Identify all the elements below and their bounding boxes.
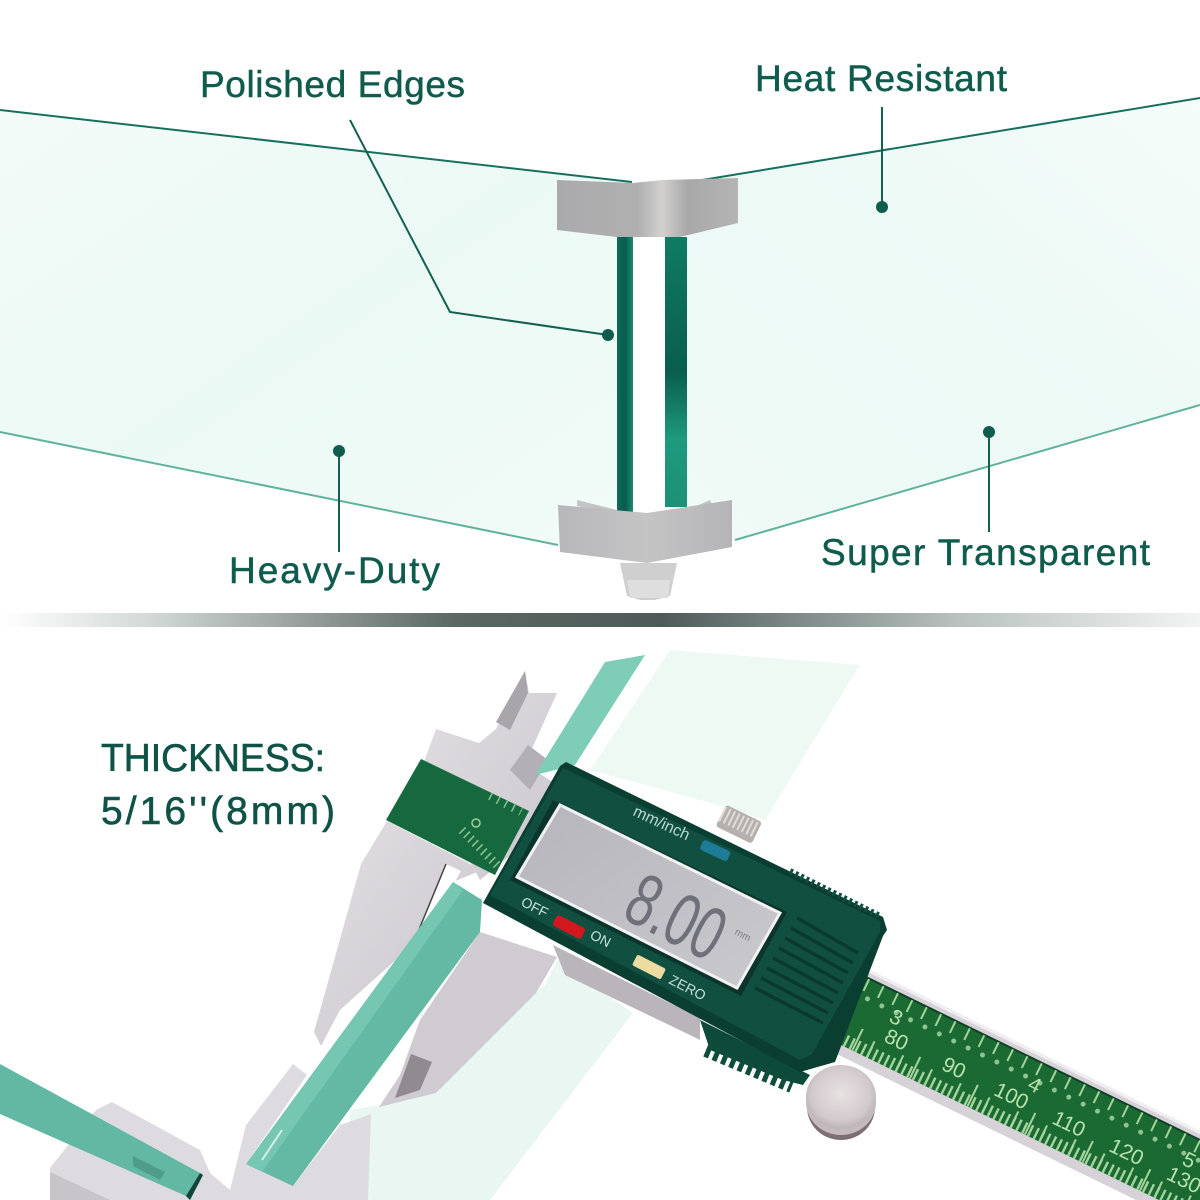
scale numbers: 4 (1024, 1072, 1045, 1098)
label: Heat Resistant: Heat Resistant (755, 58, 1008, 99)
LCD recess (510, 800, 787, 996)
panel: glass corner product view (0, 98, 1200, 600)
right glass pane (687, 98, 1200, 540)
glass edge through caliper, upper part (535, 655, 645, 775)
caliper green scale stub (386, 759, 529, 875)
glass background plates (350, 650, 860, 1200)
thumb lock disc (806, 1065, 876, 1140)
scale numbers: 120 (1106, 1134, 1147, 1170)
heading: thickness: THICKNESS: (101, 737, 325, 780)
bottom metal bracket (558, 500, 732, 600)
left glass pane (0, 111, 632, 545)
mode button (699, 839, 731, 862)
label: Heavy-Duty: Heavy-Duty (229, 550, 440, 591)
grip ridges (755, 918, 858, 1023)
value: thickness measurement: 5/16''(8mm) (101, 790, 335, 833)
ON label: ON (588, 926, 614, 950)
top metal bracket (557, 178, 738, 237)
millimetre ticks (840, 1032, 1200, 1200)
leader: Heat Resistant (876, 107, 888, 213)
left glass bar end (0, 1064, 203, 1200)
slider block under body (553, 945, 700, 1040)
leader: Heavy-Duty (333, 445, 345, 552)
label: Polished Edges: Polished Edges (200, 64, 465, 105)
jaw notch (418, 864, 461, 935)
mm/inch label: mm/inch (630, 803, 692, 844)
digital display body (483, 762, 887, 1072)
left polished glass edge (617, 237, 633, 512)
scale numbers: 80 (881, 1025, 912, 1056)
scale numbers: 3 (886, 1005, 906, 1031)
lower-right caliper jaw (379, 932, 557, 1107)
scale numbers: 110 (1049, 1107, 1089, 1142)
power button (552, 914, 586, 940)
leader: Polished Edges (350, 120, 614, 341)
label: Super Transparent: Super Transparent (821, 532, 1151, 573)
knurled thumb wheel (700, 1020, 810, 1086)
zero button (632, 954, 666, 980)
leader: Super Transparent (983, 426, 995, 532)
right polished glass edge (665, 237, 687, 507)
LCD screen (517, 805, 780, 988)
LCD reading: 8.00 (613, 856, 740, 977)
ZERO label: ZERO (667, 971, 709, 1003)
section divider band (0, 613, 1200, 627)
scale numbers (877, 1005, 1200, 1198)
OFF label: OFF (519, 893, 551, 920)
panel: caliper measuring glass thickness (0, 650, 1200, 1200)
lower-left caliper jaw (314, 821, 482, 1046)
scale numbers: 90 (938, 1053, 969, 1084)
LCD unit: mm (733, 927, 752, 944)
steel ruler with scale (815, 962, 1200, 1200)
inch ticks and dots (860, 985, 1200, 1179)
thumb screw, top (716, 805, 762, 844)
scale numbers: 100 (990, 1078, 1032, 1114)
glass edge through caliper, main bar (246, 882, 482, 1190)
upper caliper jaws (421, 671, 580, 880)
scale numbers: 5 (1179, 1148, 1199, 1174)
glass edge lines (0, 98, 1200, 545)
metal glass clamp bracket (50, 1064, 371, 1200)
serrated top edge (790, 871, 880, 916)
